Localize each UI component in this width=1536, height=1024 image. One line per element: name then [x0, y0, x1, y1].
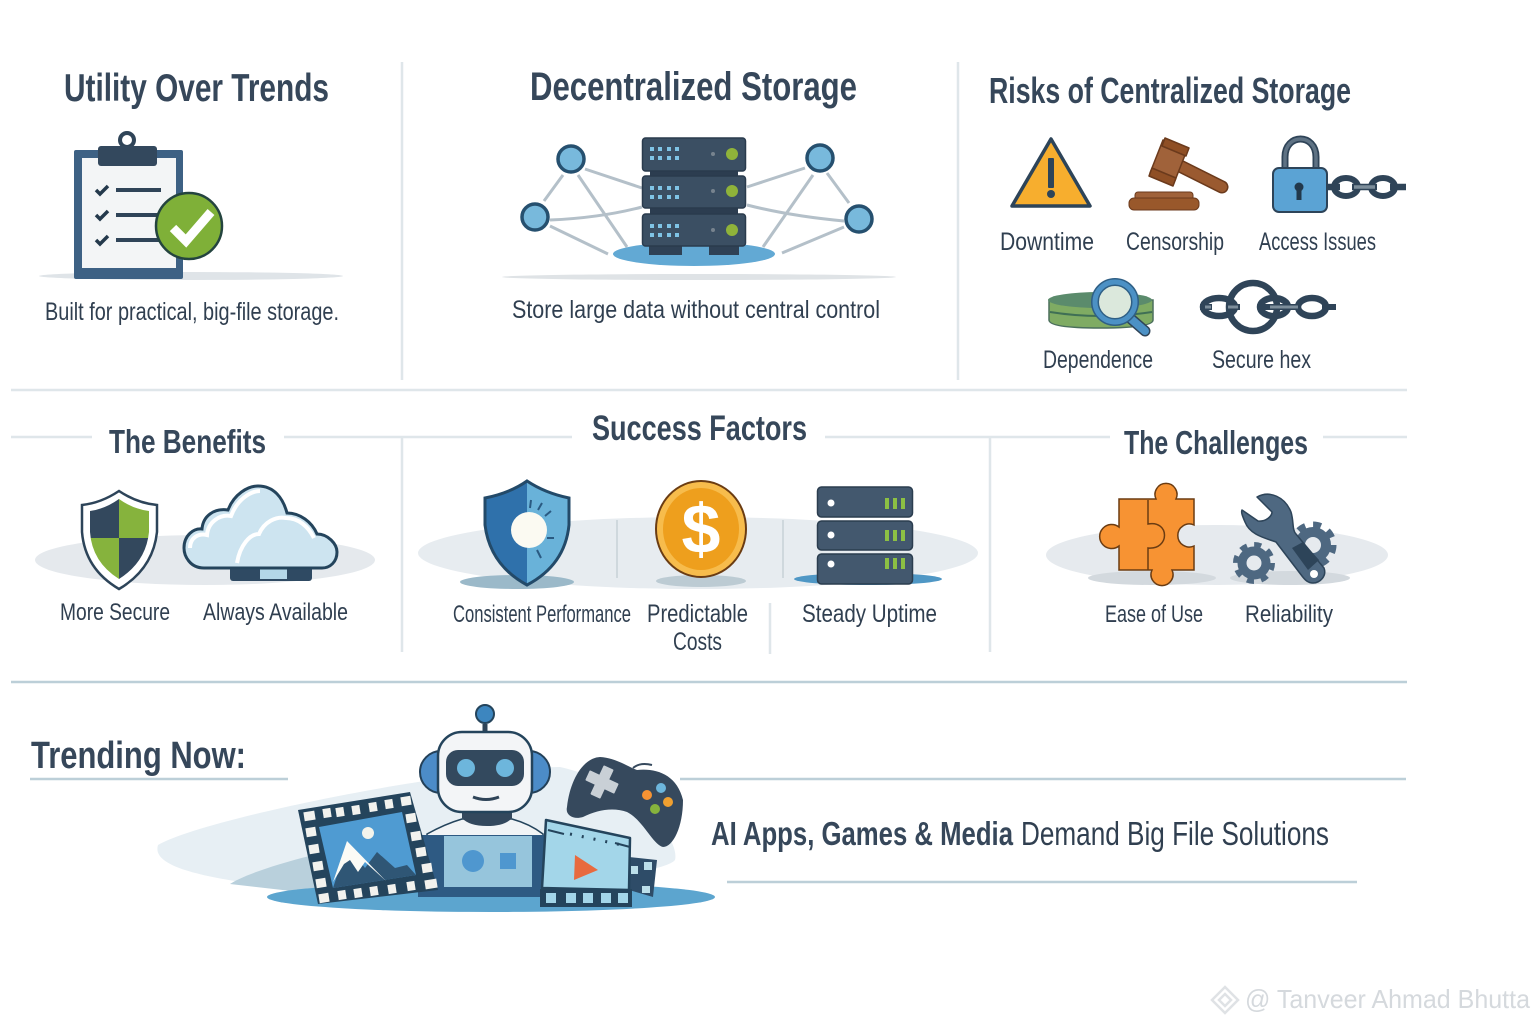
heading: the challenges: The Challenges	[1124, 424, 1308, 461]
risk: secure hex	[1200, 283, 1336, 374]
panel: the challenges	[1046, 424, 1388, 628]
backdrop: challenges ellipse	[1046, 525, 1388, 585]
backdrop: success ellipse	[418, 517, 978, 589]
benefit: more secure: More Secure	[60, 599, 170, 626]
risk: downtime: Downtime	[1000, 228, 1094, 256]
heading: trending now: Trending Now:	[31, 735, 246, 777]
illustration: robot, game controller and media	[157, 705, 715, 912]
factor: steady uptime: Steady Uptime	[802, 600, 937, 628]
heading: success factors: Success Factors	[592, 409, 807, 448]
icon: clipboard with check badge	[39, 133, 343, 280]
challenge: ease of use: Ease of Use	[1105, 601, 1203, 628]
watermark: @ Tanveer Ahmad Bhutta	[1245, 984, 1531, 1014]
caption: decentralized: Store large data without central control	[512, 296, 880, 324]
factor: consistent performance: Consistent Performance	[453, 601, 631, 628]
icon: server network	[502, 138, 896, 280]
challenge: reliability: Reliability	[1245, 601, 1333, 628]
heading: decentralized storage: Decentralized Storage	[530, 65, 857, 109]
panel: utility over trends	[39, 67, 343, 326]
backdrop: benefits ellipse	[35, 535, 375, 585]
factor: predictable costs	[647, 481, 748, 656]
factor: predictable costs: Predictable	[647, 600, 748, 628]
risk: dependence	[1043, 282, 1153, 374]
headline: big file demand	[711, 815, 1329, 852]
challenge: ease of use	[1088, 483, 1216, 628]
panel: risks of centralized storage	[989, 70, 1406, 374]
factor: steady uptime	[794, 487, 942, 628]
panel: success factors	[418, 409, 978, 656]
panel: trending now	[31, 705, 715, 912]
risk: downtime	[1000, 139, 1094, 256]
headline: big file demand: Demand Big File Solutions	[1021, 815, 1329, 852]
risk: secure hex: Secure hex	[1212, 346, 1311, 374]
panel: the benefits	[35, 423, 375, 626]
caption: utility: Built for practical, big-file storage.	[45, 298, 339, 326]
challenge: reliability	[1230, 494, 1350, 628]
risk: access issues	[1259, 139, 1406, 256]
panel: decentralized storage	[502, 65, 896, 324]
factor: consistent performance	[453, 478, 631, 628]
headline: big file demand: AI Apps, Games & Media	[711, 815, 1013, 852]
heading: risks: Risks of Centralized Storage	[989, 70, 1351, 111]
benefit: always available	[184, 486, 348, 626]
risk: censorship	[1126, 138, 1224, 256]
heading: the benefits: The Benefits	[109, 423, 266, 460]
risk: access issues: Access Issues	[1259, 228, 1376, 256]
benefit: more secure	[60, 491, 170, 626]
heading: utility over trends: Utility Over Trends	[64, 67, 329, 110]
factor: predictable costs: $	[682, 490, 720, 568]
benefit: always available: Always Available	[203, 599, 348, 626]
risk: dependence: Dependence	[1043, 346, 1153, 374]
risk: censorship: Censorship	[1126, 228, 1224, 256]
factor: predictable costs: Costs	[673, 628, 722, 656]
